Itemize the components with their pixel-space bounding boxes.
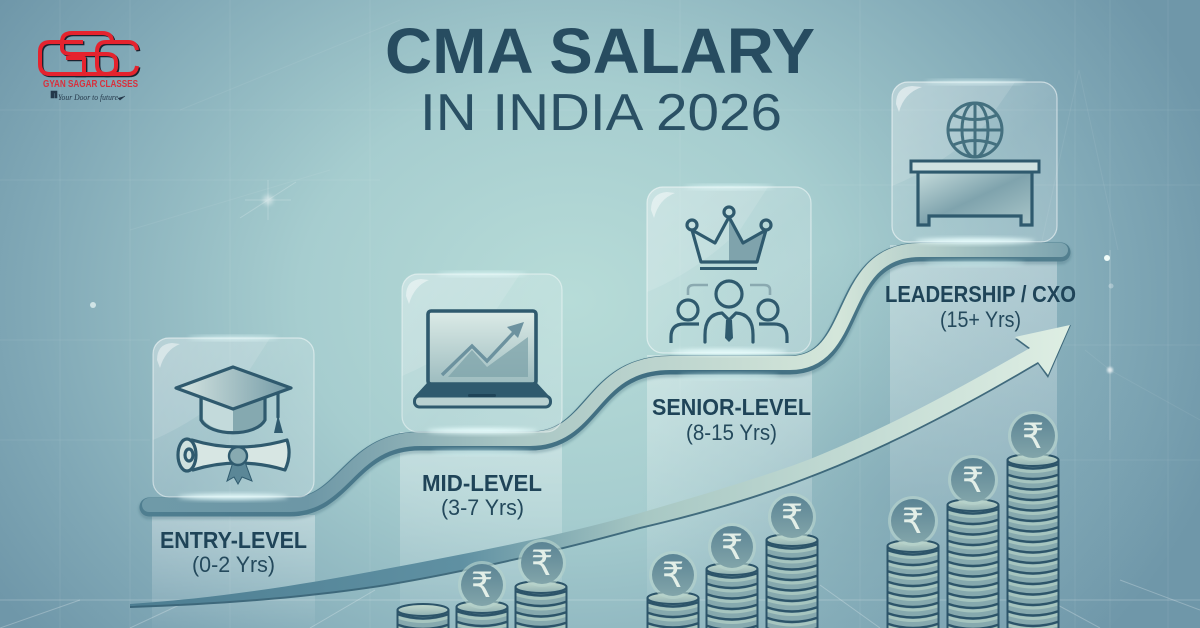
stack 1 bbox=[887, 540, 939, 628]
logo tagline: Your Door to future bbox=[58, 92, 118, 102]
stack 2 bbox=[456, 601, 508, 628]
career ribbon bbox=[149, 250, 1061, 509]
stack 1 bbox=[397, 604, 449, 628]
coin: ₹ bbox=[962, 461, 984, 500]
icon: globe on desk bbox=[911, 103, 1039, 225]
coin bbox=[458, 561, 506, 609]
coin stacks: leadership bbox=[887, 411, 1059, 628]
coin bbox=[649, 551, 697, 599]
icon: graduation cap and diploma bbox=[176, 367, 291, 484]
stack 3 bbox=[1007, 454, 1059, 628]
label: senior-level bbox=[652, 394, 811, 445]
coin bbox=[768, 493, 816, 541]
coin: ₹ bbox=[902, 502, 924, 541]
coin bbox=[888, 496, 938, 546]
coin stacks: entry level bbox=[397, 539, 567, 628]
light flares bbox=[90, 180, 1114, 440]
coin stacks: senior level bbox=[647, 493, 818, 628]
panel: senior-level card bbox=[647, 185, 811, 355]
icon: laptop with rising chart bbox=[414, 311, 550, 407]
stack 3 bbox=[766, 534, 818, 628]
label: senior-level: SENIOR-LEVEL bbox=[652, 394, 811, 420]
label: mid-level bbox=[422, 470, 542, 520]
panel: leadership card bbox=[892, 80, 1057, 244]
logo name: GYAN SAGAR CLASSES bbox=[43, 78, 138, 90]
label: entry-level: ENTRY-LEVEL bbox=[160, 527, 307, 553]
coin: ₹ bbox=[781, 498, 803, 537]
label: entry-level: (0-2 Yrs) bbox=[192, 552, 275, 577]
coin bbox=[948, 455, 998, 505]
coin bbox=[518, 539, 566, 587]
panel: entry-level card bbox=[153, 336, 314, 500]
logo: Gyan Sagar Classes bbox=[40, 33, 138, 102]
title line 2: IN INDIA 2026 bbox=[420, 84, 782, 142]
label: mid-level: MID-LEVEL bbox=[422, 470, 542, 496]
label: mid-level: (3-7 Yrs) bbox=[441, 495, 524, 520]
title line 1: CMA SALARY bbox=[385, 15, 815, 87]
panel: mid-level card bbox=[402, 272, 562, 434]
coin: ₹ bbox=[471, 566, 493, 605]
stack 2 bbox=[947, 499, 999, 628]
stack 1 bbox=[647, 592, 699, 628]
label: leadership bbox=[885, 281, 1076, 332]
coin: ₹ bbox=[531, 544, 553, 583]
column backdrops bbox=[152, 245, 1057, 628]
title bbox=[385, 15, 815, 142]
growth arrow bbox=[130, 325, 1071, 608]
label: entry-level bbox=[160, 527, 307, 577]
stack 2 bbox=[706, 563, 758, 628]
label: leadership: LEADERSHIP / CXO bbox=[885, 281, 1076, 307]
coin bbox=[708, 523, 756, 571]
coin: ₹ bbox=[1022, 417, 1044, 456]
label: leadership: (15+ Yrs) bbox=[940, 307, 1021, 332]
coin bbox=[1008, 411, 1058, 461]
logo mark: GSC bbox=[40, 33, 138, 75]
icon: crown over team bbox=[671, 207, 787, 343]
coin: ₹ bbox=[721, 528, 743, 567]
stack 3 bbox=[515, 581, 567, 628]
coin: ₹ bbox=[662, 556, 684, 595]
label: senior-level: (8-15 Yrs) bbox=[686, 420, 777, 445]
